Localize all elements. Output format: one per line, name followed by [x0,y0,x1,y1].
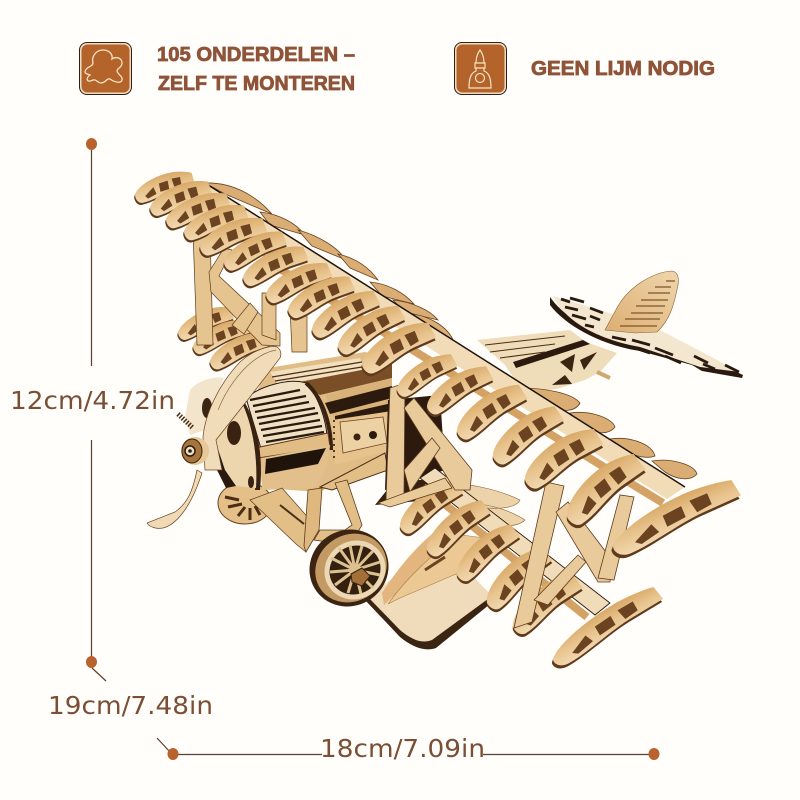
heading: pieces: 105 ONDERDELEN – [157,44,355,66]
far lower wing ribs [173,303,274,373]
undercarriage [250,480,362,552]
icon: glue bottle [454,42,507,95]
propeller [147,347,281,528]
icon: puzzle piece [79,42,132,95]
width dimension: 18cm/7.09in [320,734,485,763]
width dimension [157,734,660,763]
tail section [477,271,743,395]
heading: pieces: ZELF TE MONTEREN [158,73,355,95]
rear wheel [218,482,272,524]
base board and fins [365,520,500,649]
depth dimension label: 19cm/7.48in [48,691,213,720]
heading: pieces [157,44,355,95]
front wheel [295,515,403,621]
lower wing near side [390,468,669,673]
upper wing [131,168,746,562]
far side back ribs [205,183,697,479]
engine louvre section [246,381,327,452]
height dimension: 12cm/4.72in [10,386,175,415]
height dimension [10,138,175,681]
fuselage [213,352,470,505]
near struts [378,383,634,628]
heading: no glue: GEEN LIJM NODIG [531,58,715,80]
wooden biplane model [131,168,746,673]
far wing struts [193,232,307,352]
